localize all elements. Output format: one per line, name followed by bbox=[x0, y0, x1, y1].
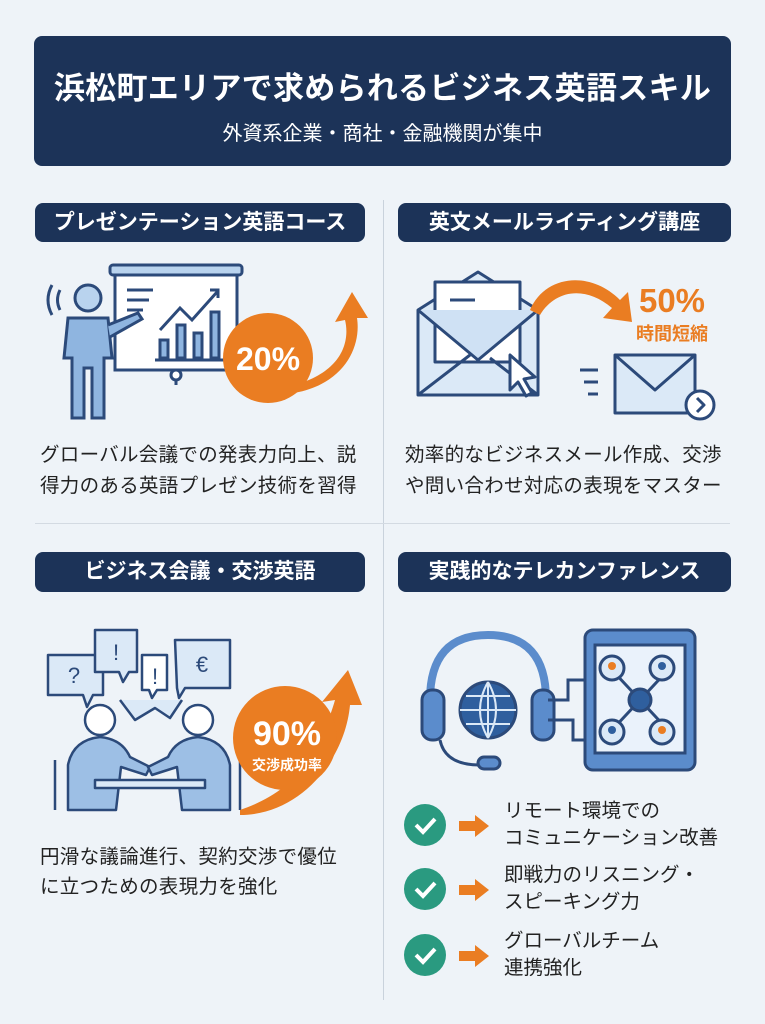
panel header: presentation bbox=[35, 203, 365, 242]
icon: meeting handshake with 90% bbox=[46, 628, 362, 815]
checklist item 2 bbox=[404, 864, 699, 913]
checklist item 2: スピーキング力 bbox=[504, 891, 640, 913]
checklist item 2: 即戦力のリスニング・ bbox=[504, 864, 699, 886]
panel header: negotiation bbox=[35, 552, 365, 592]
text: negotiation description: に立つための表現力を強化 bbox=[40, 876, 278, 898]
icon: email with 50% time reduction bbox=[416, 270, 716, 420]
icon: meeting handshake with 90%: € bbox=[196, 652, 208, 677]
icon: meeting handshake with 90%: 90% bbox=[253, 715, 321, 753]
icon: email with 50% time reduction: 時間短縮 bbox=[636, 324, 708, 344]
checklist item 1 bbox=[404, 800, 718, 849]
text: negotiation description: 円滑な議論進行、契約交渉で優位 bbox=[40, 846, 337, 868]
text: presentation description: グローバル会議での発表力向上、説 bbox=[40, 444, 357, 466]
text: email description: 効率的なビジネスメール作成、交渉 bbox=[405, 444, 722, 466]
panel header: negotiation: ビジネス会議・交渉英語 bbox=[84, 560, 316, 583]
icon: headset and tablet network bbox=[420, 628, 696, 772]
checklist item 1: リモート環境での bbox=[504, 800, 660, 822]
icon: presenter with chart and 20%: 20% bbox=[236, 341, 300, 377]
title banner bbox=[34, 36, 731, 166]
text: negotiation description bbox=[40, 846, 337, 898]
text: email description: や問い合わせ対応の表現をマスター bbox=[405, 475, 722, 497]
icon: email with 50% time reduction: 50% bbox=[639, 282, 705, 319]
icon: meeting handshake with 90%: ? bbox=[68, 663, 80, 688]
checklist item 1: コミュニケーション改善 bbox=[504, 827, 718, 849]
icon: meeting handshake with 90%: ! bbox=[152, 664, 158, 689]
panel header: presentation: プレゼンテーション英語コース bbox=[54, 211, 346, 234]
checklist item 3: 連携強化 bbox=[504, 957, 582, 979]
text: email description bbox=[405, 444, 722, 497]
title: 浜松町エリアで求められるビジネス英語スキル bbox=[54, 71, 711, 106]
icon: meeting handshake with 90%: ! bbox=[113, 640, 119, 665]
panel header: teleconference bbox=[398, 552, 731, 592]
subtitle: 外資系企業・商社・金融機関が集中 bbox=[222, 123, 542, 145]
checklist item 3 bbox=[404, 930, 659, 979]
panel header: email bbox=[398, 203, 731, 242]
icon: presenter with chart and 20% bbox=[46, 264, 368, 420]
panel header: teleconference: 実践的なテレカンファレンス bbox=[429, 560, 700, 583]
text: presentation description: 得力のある英語プレゼン技術を習得 bbox=[40, 475, 357, 497]
text: presentation description bbox=[40, 444, 357, 497]
icon: meeting handshake with 90%: 交渉成功率 bbox=[252, 757, 322, 773]
panel header: email: 英文メールライティング講座 bbox=[429, 211, 700, 234]
checklist item 3: グローバルチーム bbox=[504, 930, 659, 952]
